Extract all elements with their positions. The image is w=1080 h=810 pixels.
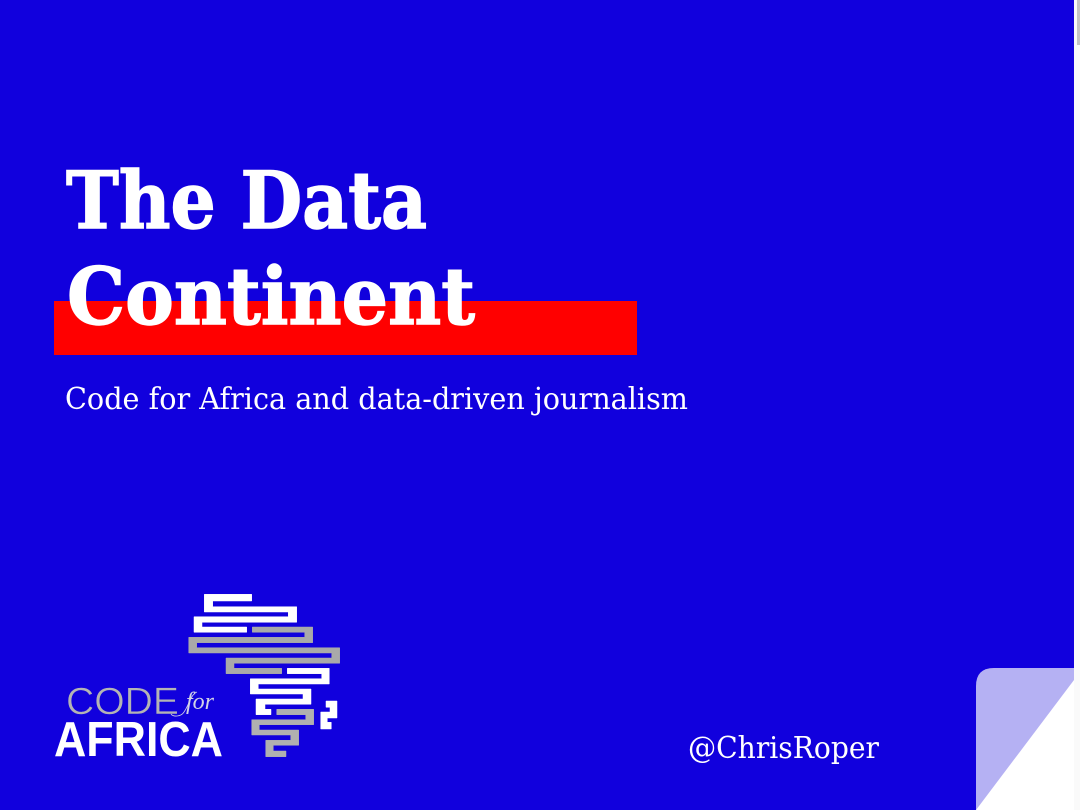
logo wordmark: AFRICA: AFRICA [54,713,223,767]
page curl white fold [976,680,1074,810]
logo wordmark: CODE: CODE [66,681,179,723]
scrollbar strip [1074,0,1080,810]
logo wordmark: for: for [186,689,215,715]
twitter handle: @ChrisRoper [688,731,880,765]
red highlight bar [54,301,637,355]
title: The Data [66,154,427,247]
logo: Code for Africa [54,594,340,767]
page curl corner [976,668,1074,810]
logo wordmark: for [171,689,215,716]
page curl shade [976,668,1074,810]
title [66,154,475,343]
title: Continent [67,250,475,343]
subtitle: Code for Africa and data-driven journalism [65,382,688,416]
logo icon: Africa map [189,594,340,757]
